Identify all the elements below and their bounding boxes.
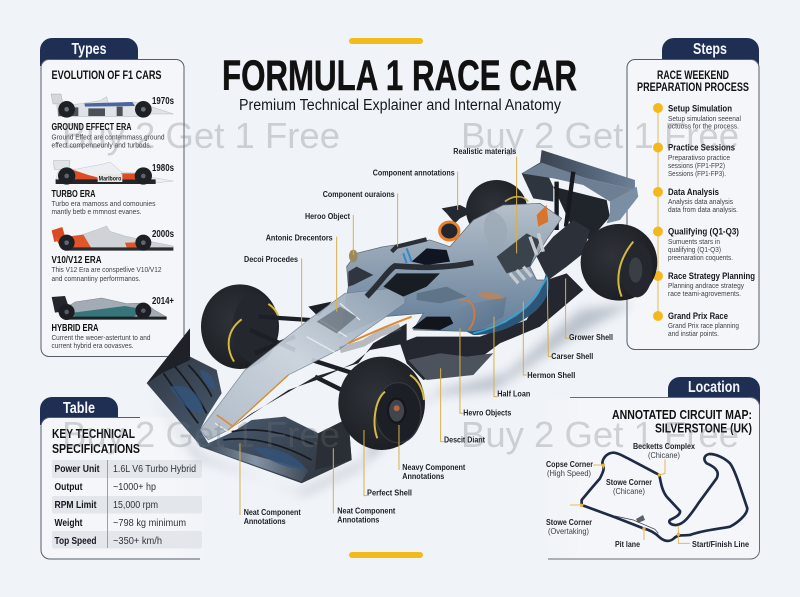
step: race strategy planning xyxy=(668,271,755,298)
tab: types: Types xyxy=(72,41,107,58)
step: setup simulation: Setup simulation seeenal xyxy=(668,114,741,123)
title: FORMULA 1 RACE CAR xyxy=(222,52,577,100)
era description: ground effect: effect compenneunly and turbods. xyxy=(52,140,152,150)
icon: 2014+ car xyxy=(52,296,167,320)
floor xyxy=(400,273,583,380)
watermarks: Buy 2 Get 1 Free xyxy=(62,414,340,455)
callout: half loan: Half Loan xyxy=(497,389,530,399)
callout: neat component annotations left: Annotations xyxy=(244,516,286,526)
step: qualifying: preenaration coquents. xyxy=(668,253,733,262)
icon: 1980s car xyxy=(53,161,173,185)
heading: annotated circuit map: ANNOTATED CIRCUIT MAP: xyxy=(612,407,752,422)
spec table: ~1000+ hp xyxy=(113,482,156,493)
callout: neavy component annotations: Annotations xyxy=(402,471,444,481)
chassis under nose xyxy=(228,323,407,430)
spec table: ~798 kg minimum xyxy=(113,518,186,529)
callout: perfect shell: Perfect Shell xyxy=(367,488,412,498)
step: grand prix race xyxy=(668,311,739,338)
heading: race weekend: RACE WEEKEND xyxy=(657,70,729,82)
tab: steps xyxy=(662,38,759,66)
label: stowe corner overtaking: Stowe Corner xyxy=(546,517,593,527)
watermarks: Buy 2 Get 1 Free xyxy=(62,115,340,156)
era description: V10/V12: and comnantiny perforrmanos. xyxy=(52,274,140,283)
steps panel box xyxy=(627,60,759,350)
era description: turbo xyxy=(52,199,156,216)
air intake xyxy=(440,205,473,240)
icon: 1970s car xyxy=(51,94,173,118)
callout: neat component annotations right: Neat Component xyxy=(337,505,395,515)
step: data analysis: Analysis data analysis xyxy=(668,197,733,206)
watermarks: Buy 2 Get 1 Free xyxy=(461,414,739,455)
step: practice sessions xyxy=(668,142,735,178)
heading: annotated circuit map xyxy=(612,407,752,436)
icon: 2000s car xyxy=(52,226,173,251)
step: setup simulation: Setup Simulation xyxy=(668,104,732,114)
era name: hybrid: HYBRID ERA xyxy=(52,322,99,334)
callout leader lines xyxy=(240,157,569,515)
table panel box xyxy=(41,418,210,559)
callout: neat component annotations left xyxy=(244,507,301,526)
tab: types xyxy=(40,38,138,66)
callout: descit diant: Descit Diant xyxy=(444,434,485,444)
step: grand prix race: Grand Prix race planning xyxy=(668,321,739,330)
label: stowe corner chicane: (Chicane) xyxy=(613,486,645,496)
era description: V10/V12: This V12 Era are conspetlive V10/V12 xyxy=(52,265,162,274)
tab: table xyxy=(40,397,118,425)
label: start/finish line: Start/Finish Line xyxy=(692,539,749,549)
label: stowe corner overtaking: (Overtaking) xyxy=(548,526,589,536)
callout: component ouraions: Component ouraions xyxy=(323,189,395,199)
nose internals xyxy=(215,303,412,432)
callout: neat component annotations right xyxy=(337,505,395,524)
heading: annotated circuit map: SILVERSTONE (UK) xyxy=(655,420,752,436)
step: race strategy planning: Race Strategy Planning xyxy=(668,271,755,282)
step: qualifying: qualifying (Q1-Q3) xyxy=(668,245,721,254)
panel: steps xyxy=(627,38,759,350)
label: becketts complex: (Chicane) xyxy=(648,450,680,460)
spec table: ~350+ km/h xyxy=(113,536,162,547)
callout: neat component annotations left: Neat Component xyxy=(244,507,301,517)
tab: table: Table xyxy=(63,400,95,417)
step: race strategy planning: race teami-agrovements. xyxy=(668,289,741,298)
flag marker xyxy=(636,515,645,523)
panel: types xyxy=(40,38,184,356)
bottom accent bar xyxy=(349,552,423,558)
mirror xyxy=(348,250,373,287)
step: practice sessions: sessions (FP1-FP2) xyxy=(668,161,725,170)
callout: grower shell: Grower Shell xyxy=(569,332,613,342)
spec table: Output xyxy=(54,482,83,493)
spec table: Power Unit xyxy=(54,464,100,475)
callout: antonic drecentors: Antonic Drecentors xyxy=(266,233,333,243)
types panel box xyxy=(41,60,184,356)
callout: decoi procedes: Decoi Procedes xyxy=(244,254,298,264)
front wing xyxy=(147,328,352,483)
front left tyre xyxy=(201,284,279,369)
sidepod xyxy=(412,273,549,335)
step: qualifying: Sumuents stars in xyxy=(668,237,720,246)
era label: 1970s: 1970s xyxy=(152,96,174,107)
step: race strategy planning: Planning andrace strategy xyxy=(668,281,744,290)
callout: neat component annotations right: Annotations xyxy=(337,514,379,524)
icon: 1980s car: Marlboro xyxy=(99,175,121,182)
callout: realistic materials: Realistic materials xyxy=(453,146,516,156)
front suspension xyxy=(250,317,353,390)
era name: ground effect: GROUND EFFECT ERA xyxy=(52,121,132,133)
car body xyxy=(340,203,562,337)
timeline xyxy=(653,103,663,321)
callout: heroo object: Heroo Object xyxy=(305,211,350,221)
era label: 2014+: 2014+ xyxy=(152,296,174,307)
era name: V10/V12: V10/V12 ERA xyxy=(52,254,102,266)
callout: hevro objects: Hevro Objects xyxy=(463,408,511,418)
heading: key technical specifications xyxy=(52,426,140,456)
step: practice sessions: Sessions (FP1-FP3). xyxy=(668,169,726,178)
era description: ground effect xyxy=(52,132,164,150)
label: becketts complex xyxy=(633,441,695,460)
far side chassis piece xyxy=(308,302,332,317)
step: grand prix race: Grand Prix Race xyxy=(668,311,728,322)
location panel box xyxy=(540,398,760,559)
step: qualifying: Qualifying (Q1-Q3) xyxy=(668,226,739,238)
callout: component annotations: Component annotations xyxy=(373,168,455,178)
era name: turbo: TURBO ERA xyxy=(52,188,96,200)
label: stowe corner chicane: Stowe Corner xyxy=(606,477,653,487)
rear structure xyxy=(537,220,590,280)
label: becketts complex: Becketts Complex xyxy=(633,441,695,451)
rear right tyre xyxy=(581,224,657,301)
subtitle: Premium Technical Explainer and Internal Anatomy xyxy=(239,97,561,114)
label: copse corner: (High Speed) xyxy=(547,468,591,478)
tab: steps: Steps xyxy=(693,41,727,58)
era description: hybrid xyxy=(52,333,150,350)
label: copse corner: Copse Corner xyxy=(546,459,594,469)
panel: location xyxy=(540,377,760,559)
callout: carser shell: Carser Shell xyxy=(551,351,593,361)
callout: hermon shell: Hermon Shell xyxy=(527,370,575,380)
tab: location: Location xyxy=(688,379,740,396)
step: setup simulation: octuoss for the process. xyxy=(668,122,739,130)
panel: table xyxy=(40,397,210,559)
spec table: RPM Limit xyxy=(54,500,97,511)
circuit map xyxy=(570,453,747,543)
top accent bar xyxy=(349,38,423,44)
spec table: Top Speed xyxy=(54,536,96,547)
era description: V10/V12 xyxy=(52,265,162,283)
front right tyre xyxy=(338,357,425,450)
watermarks: Buy 2 Get 1 Free xyxy=(461,115,739,156)
step: data analysis: Data Analysis xyxy=(668,187,719,198)
callout: neavy component annotations xyxy=(402,462,465,481)
cockpit and halo xyxy=(367,239,473,297)
nose cone xyxy=(200,287,405,440)
spec table: 1.6L V6 Turbo Hybrid xyxy=(113,464,196,475)
engine internals xyxy=(484,205,548,283)
heading: race weekend xyxy=(637,70,749,94)
hero: race car xyxy=(147,150,657,515)
step: practice sessions: Preparativso practice xyxy=(668,153,730,162)
step: practice sessions: Practice Sessions xyxy=(668,142,735,154)
rear wing xyxy=(522,150,638,240)
step: data analysis: data from data analysis. xyxy=(668,205,738,214)
era description: turbo: mantly betb e mmnost evanes. xyxy=(52,207,142,216)
label: pit lane: Pit lane xyxy=(615,539,640,549)
label: copse corner xyxy=(546,459,594,478)
heading: key technical specifications: KEY TECHNICAL xyxy=(52,426,135,441)
step: grand prix race: and instiar points. xyxy=(668,329,719,338)
spec table: Weight xyxy=(54,518,83,529)
era description: turbo: Turbo era mamoss and comounies xyxy=(52,199,156,208)
step: data analysis xyxy=(668,187,738,214)
heading: race weekend: PREPARATION PROCESS xyxy=(637,82,749,94)
era label: 2000s: 2000s xyxy=(152,229,174,240)
step: setup simulation xyxy=(668,104,741,130)
era description: ground effect: Ground Effect are contemmass ground xyxy=(52,132,164,142)
heading: key technical specifications: SPECIFICATIONS xyxy=(52,441,140,456)
era description: hybrid: Current the weoer-astertunt to and xyxy=(52,333,150,342)
spec table xyxy=(52,460,202,548)
watermarks xyxy=(62,115,739,455)
far rear tyre xyxy=(466,180,528,240)
heading: evolution of F1 cars: EVOLUTION OF F1 CARS xyxy=(52,68,162,82)
era description: hybrid: current hybrid era oovasves. xyxy=(52,341,134,350)
floor lower plate xyxy=(408,353,493,380)
label: stowe corner chicane xyxy=(606,477,653,496)
era label: 1980s: 1980s xyxy=(152,163,174,174)
label: stowe corner overtaking xyxy=(546,517,593,536)
tab: location xyxy=(668,377,760,405)
step: qualifying xyxy=(668,226,739,262)
spec table: 15,000 rpm xyxy=(113,500,158,511)
callout: neavy component annotations: Neavy Component xyxy=(402,462,465,472)
